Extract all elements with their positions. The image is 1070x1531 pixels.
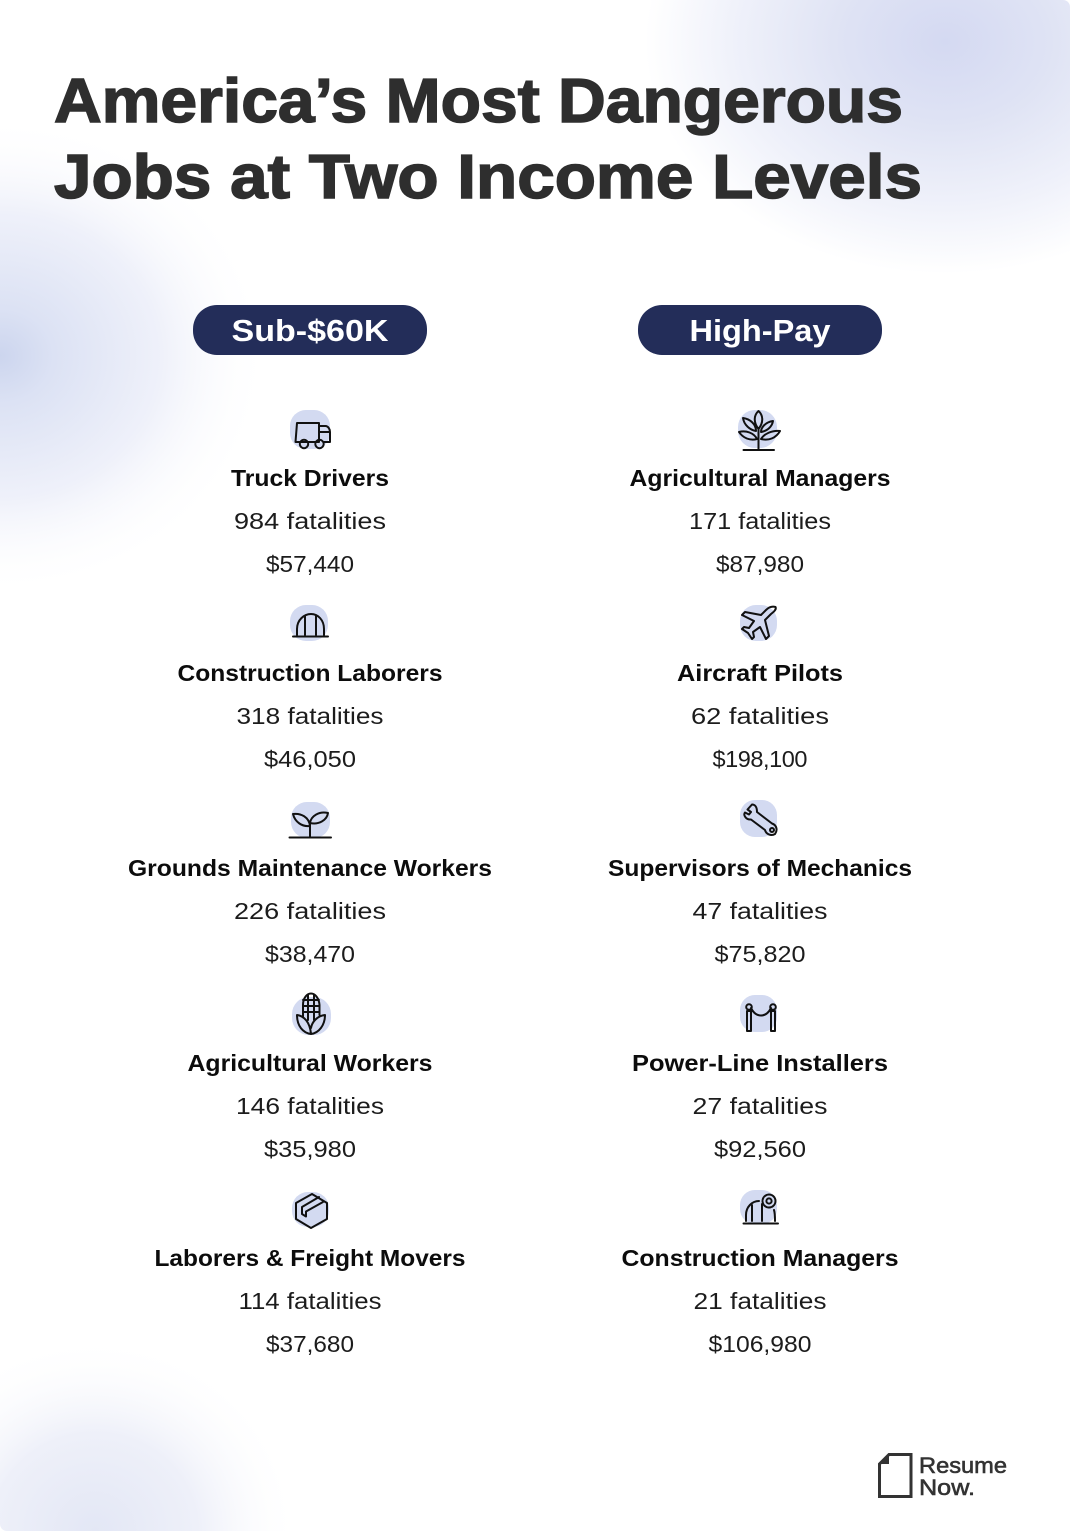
job: Power-Line Installers: $92,560 <box>714 1136 806 1162</box>
logo: Resume Now: Now. <box>919 1475 975 1500</box>
icon: hard hat <box>290 605 328 641</box>
job: Laborers & Freight Movers: 114 fatalities <box>238 1288 382 1314</box>
job: Agricultural Workers: Agricultural Workers <box>188 1050 432 1076</box>
icon: sprout <box>290 802 331 838</box>
job: Grounds Maintenance Workers: 226 fatalities <box>234 898 386 924</box>
job: Construction Laborers <box>178 605 442 772</box>
title: Jobs at Two Income Levels <box>54 143 922 212</box>
job: Aircraft Pilots: $198,100 <box>712 746 808 772</box>
job: Construction Laborers: $46,050 <box>264 746 356 772</box>
icon: airplane <box>740 605 777 641</box>
job: Power-Line Installers <box>632 995 888 1162</box>
job: Truck Drivers: 984 fatalities <box>234 508 386 534</box>
job: Truck Drivers <box>231 410 389 577</box>
logo text: Resume <box>919 1453 1007 1478</box>
icon: wrench <box>740 800 777 837</box>
job: Agricultural Managers <box>630 410 890 577</box>
job: Aircraft Pilots <box>677 605 843 772</box>
job: Laborers & Freight Movers <box>154 1192 466 1357</box>
job: Truck Drivers: Truck Drivers <box>231 465 389 491</box>
job: Aircraft Pilots: 62 fatalities <box>691 703 829 729</box>
icon: document <box>880 1454 911 1496</box>
job: Agricultural Workers <box>188 994 432 1162</box>
logo: Resume Now <box>879 1453 1007 1500</box>
job: Supervisors of Mechanics: Supervisors of Mechanics <box>608 855 912 881</box>
pill: High-Pay <box>638 305 882 355</box>
icon: hard hat with gear <box>740 1190 778 1224</box>
pill: Sub-$60K <box>193 305 427 355</box>
job: Agricultural Managers: $87,980 <box>716 551 804 577</box>
job: Grounds Maintenance Workers: Grounds Maintenance Workers <box>128 855 492 881</box>
job: Construction Managers: Construction Managers <box>622 1245 898 1271</box>
icon: document fold <box>879 1454 889 1464</box>
icon: package box <box>292 1192 329 1228</box>
job: Grounds Maintenance Workers: $38,470 <box>265 941 355 967</box>
job: Laborers & Freight Movers: Laborers & Freight Movers <box>154 1245 466 1271</box>
job: Power-Line Installers: Power-Line Installers <box>632 1050 888 1076</box>
column: Sub-$60K jobs <box>128 410 492 1357</box>
icon: corn <box>292 994 331 1035</box>
job: Construction Laborers: Construction Laborers <box>178 660 442 686</box>
job: Grounds Maintenance Workers <box>128 802 492 967</box>
icon: stanchion rope <box>740 995 777 1032</box>
job: Construction Managers: 21 fatalities <box>694 1288 826 1314</box>
pill: Sub-$60K: Sub-$60K <box>232 313 389 348</box>
column: High-Pay jobs <box>608 410 912 1357</box>
job: Construction Managers <box>622 1190 898 1357</box>
job: Agricultural Managers: Agricultural Managers <box>630 465 890 491</box>
job: Agricultural Workers: $35,980 <box>264 1136 356 1162</box>
job: Supervisors of Mechanics <box>608 800 912 967</box>
icon: plant <box>738 410 780 450</box>
title: America’s Most Dangerous <box>54 67 903 136</box>
job: Power-Line Installers: 27 fatalities <box>692 1093 828 1119</box>
job: Construction Managers: $106,980 <box>708 1331 812 1357</box>
job: Truck Drivers: $57,440 <box>266 551 354 577</box>
job: Agricultural Managers: 171 fatalities <box>689 508 831 534</box>
job: Agricultural Workers: 146 fatalities <box>236 1093 384 1119</box>
job: Laborers & Freight Movers: $37,680 <box>266 1331 354 1357</box>
icon: truck <box>290 410 330 449</box>
job: Supervisors of Mechanics: $75,820 <box>714 941 806 967</box>
job: Aircraft Pilots: Aircraft Pilots <box>677 660 843 686</box>
title <box>54 67 922 212</box>
pill: High-Pay: High-Pay <box>690 313 831 348</box>
job: Supervisors of Mechanics: 47 fatalities <box>692 898 828 924</box>
job: Construction Laborers: 318 fatalities <box>236 703 384 729</box>
